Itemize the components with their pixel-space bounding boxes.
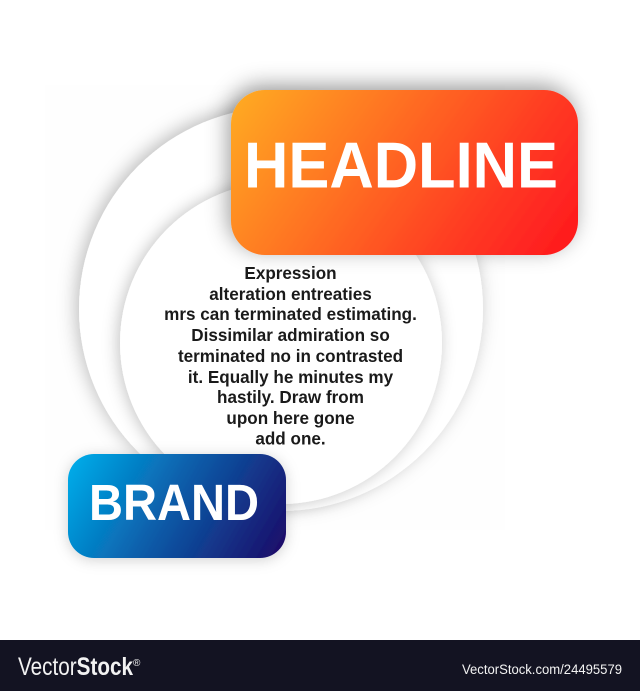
brand badge [68,454,286,558]
headline text: HEADLINE [244,128,558,202]
body text block: Expression [244,264,337,283]
registered mark: ® [133,658,141,669]
footer bar [0,640,640,691]
body text block: alteration entreaties [209,285,372,304]
body text block: terminated no in contrasted [178,347,403,366]
body text block: upon here gone [226,409,355,428]
body text block: add one. [255,430,326,448]
footer url: VectorStock.com/24495579 [462,662,622,677]
headline badge [231,90,578,255]
footer logo: VectorStock [18,653,133,681]
body text block [164,264,417,448]
inner circle [120,182,442,504]
brand text: BRAND [89,474,259,531]
body text block: hastily. Draw from [217,388,364,407]
body text block: mrs can terminated estimating. [164,305,417,324]
body text block: Dissimilar admiration so [191,326,390,345]
body text block: it. Equally he minutes my [188,368,394,387]
outer circle [79,107,483,511]
faint backing panel [45,85,505,530]
